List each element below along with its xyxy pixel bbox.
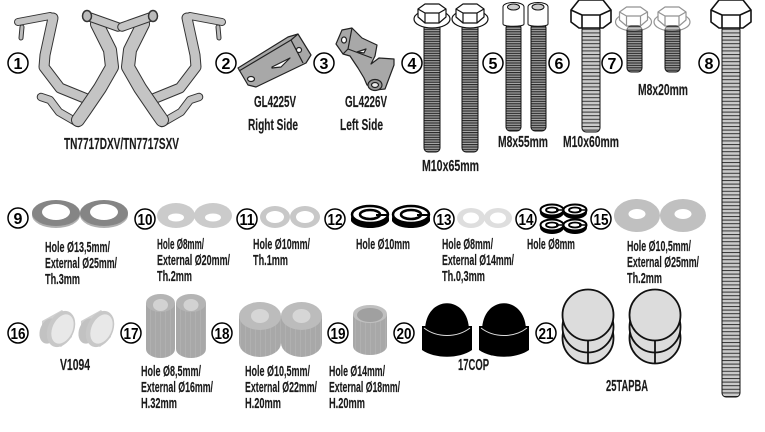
label: spacer 19 spec: H.20mm xyxy=(329,396,365,412)
label: washer 15 spec: Hole Ø10,5mm/ xyxy=(627,239,691,255)
item 9: washers xyxy=(8,200,128,288)
label: spacer 17 spec: H.32mm xyxy=(141,396,177,412)
icon: socket bolt xyxy=(528,2,548,131)
badge 4: 4 xyxy=(408,56,417,73)
icon: large washers xyxy=(614,199,706,232)
item 20: nut covers xyxy=(394,303,529,374)
badge 15: 15 xyxy=(594,212,609,229)
badge 8 xyxy=(699,53,719,73)
icon: bolt pair xyxy=(414,4,488,152)
badge 1: 1 xyxy=(14,56,23,73)
label: washer 11 spec xyxy=(253,237,310,269)
icon: thin washers xyxy=(260,206,320,228)
badge 2: 2 xyxy=(222,56,231,73)
label: washer 13 spec xyxy=(442,237,514,285)
item 7: short flange bolts xyxy=(602,7,690,99)
badge 20: 20 xyxy=(396,326,412,343)
label: spacer 19 spec xyxy=(329,364,400,412)
icon: short bolt pair xyxy=(616,7,690,72)
item 19: thin-wall spacer xyxy=(328,305,400,412)
label: M10x65mm: M10x65mm xyxy=(422,158,479,175)
badge 7: 7 xyxy=(608,56,617,73)
label: GL4225V: GL4225V xyxy=(254,94,296,111)
label: spacer 18 spec: External Ø22mm/ xyxy=(245,380,317,396)
label: Hole Ø8mm: Hole Ø8mm xyxy=(527,237,575,253)
label: Left Side: Left Side xyxy=(340,117,383,134)
icon: left engine guard xyxy=(18,10,118,123)
icon: black nut covers xyxy=(422,303,529,357)
label: 17COP: 17COP xyxy=(458,357,489,374)
item 1: engine guards xyxy=(8,10,222,153)
icon: four spring washers xyxy=(540,204,587,234)
item 17: tall spacers xyxy=(121,294,213,412)
icon: hex bolt M10x60 xyxy=(571,0,611,132)
label: washer 11 spec: Th.1mm xyxy=(253,253,288,269)
label: GL4226V: GL4226V xyxy=(345,94,387,111)
label: TN7717DXV/TN7717SXV: TN7717DXV/TN7717SXV xyxy=(64,136,179,153)
label: washer 13 spec: Hole Ø8mm/ xyxy=(442,237,493,253)
label: V1094: V1094 xyxy=(60,357,90,374)
label: spacer 17 spec: Hole Ø8,5mm/ xyxy=(141,364,201,380)
icon: thin-wall spacer xyxy=(353,305,387,355)
icon: wide spacers xyxy=(239,302,322,357)
icon: dark washers xyxy=(32,200,128,228)
item 12: spring washers xyxy=(325,206,430,253)
label: spacer 18 spec: H.20mm xyxy=(245,396,281,412)
label: spacer 18 spec xyxy=(245,364,317,412)
item 18: wide spacers xyxy=(212,302,322,412)
icon: bracket GL4225V xyxy=(238,34,311,87)
item 5: socket bolt xyxy=(483,2,524,131)
badge 3: 3 xyxy=(320,56,329,73)
label: Right Side: Right Side xyxy=(248,117,298,134)
label: M10x60mm: M10x60mm xyxy=(563,134,619,151)
label: washer 13 spec: Th.0,3mm xyxy=(442,269,485,285)
label: washer 9 spec: External Ø25mm/ xyxy=(45,256,117,272)
label: spacer 18 spec: Hole Ø10,5mm/ xyxy=(245,364,310,380)
item 4: flange bolts M10x65 xyxy=(402,4,488,175)
label: washer 9 spec: Th.3mm xyxy=(45,272,80,288)
label: spacer 19 spec: External Ø18mm/ xyxy=(329,380,400,396)
badge 11: 11 xyxy=(240,212,255,229)
item 3: left side bracket xyxy=(314,28,394,134)
item 6: socket bolt xyxy=(498,0,619,151)
badge 6: 6 xyxy=(555,56,564,73)
icon: stacked caps xyxy=(562,290,680,364)
label: washer 11 spec: Hole Ø10mm/ xyxy=(253,237,310,253)
icon: right engine guard xyxy=(122,10,222,123)
badge 6 xyxy=(549,53,569,73)
badge 19: 19 xyxy=(330,326,346,343)
badge 14: 14 xyxy=(518,212,534,229)
label: washer 15 spec: Th.2mm xyxy=(627,271,662,287)
label: spacer 19 spec: Hole Ø14mm/ xyxy=(329,364,385,380)
badge 16: 16 xyxy=(10,326,26,343)
badge 8: 8 xyxy=(705,56,714,73)
item 14: small spring washers xyxy=(516,204,587,253)
icon: long bolt xyxy=(711,0,751,397)
label: spacer 17 spec xyxy=(141,364,213,412)
label: washer 10 spec xyxy=(157,237,230,285)
badge 13: 13 xyxy=(436,212,452,229)
label: washer 10 spec: External Ø20mm/ xyxy=(157,253,230,269)
label: washer 10 spec: Hole Ø8mm/ xyxy=(157,237,204,253)
label: Hole Ø10mm: Hole Ø10mm xyxy=(356,237,410,253)
icon: tall spacers xyxy=(146,294,206,358)
badge 10: 10 xyxy=(138,212,153,229)
icon: bracket GL4226V xyxy=(336,28,394,90)
label: washer 10 spec: Th.2mm xyxy=(157,269,192,285)
label: washer 15 spec: External Ø25mm/ xyxy=(627,255,699,271)
label: washer 9 spec xyxy=(45,240,117,288)
item 21: round caps xyxy=(536,290,680,395)
badge 18: 18 xyxy=(214,326,230,343)
badge 4 xyxy=(402,53,422,73)
label: spacer 17 spec: External Ø16mm/ xyxy=(141,380,213,396)
item 16: plastic bushes xyxy=(8,306,120,374)
item 11: thin washers xyxy=(237,206,320,269)
icon: bushes V1094 xyxy=(36,306,120,352)
item 13: shim washers xyxy=(434,208,514,285)
icon: shim washers xyxy=(457,208,512,228)
item 8: long hex bolt xyxy=(699,0,751,397)
label: washer 9 spec: Hole Ø13,5mm/ xyxy=(45,240,110,256)
icon: socket bolt xyxy=(503,2,524,131)
badge 17: 17 xyxy=(124,326,139,343)
badge 5: 5 xyxy=(489,56,498,73)
icon: light washers xyxy=(157,203,232,228)
label: washer 13 spec: External Ø14mm/ xyxy=(442,253,514,269)
item 15: large washers xyxy=(591,199,706,287)
badge 1 xyxy=(8,53,28,73)
label: 25TAPBA: 25TAPBA xyxy=(606,378,648,395)
label: M8x55mm: M8x55mm xyxy=(498,134,548,151)
label: washer 15 spec xyxy=(627,239,699,287)
label: M8x20mm: M8x20mm xyxy=(638,82,688,99)
badge 12: 12 xyxy=(328,212,343,229)
badge 9: 9 xyxy=(14,211,23,228)
icon: spring washers xyxy=(351,206,430,228)
badge 21: 21 xyxy=(538,326,554,343)
item 2: right side bracket xyxy=(216,34,311,134)
item 10: washers xyxy=(135,203,232,285)
